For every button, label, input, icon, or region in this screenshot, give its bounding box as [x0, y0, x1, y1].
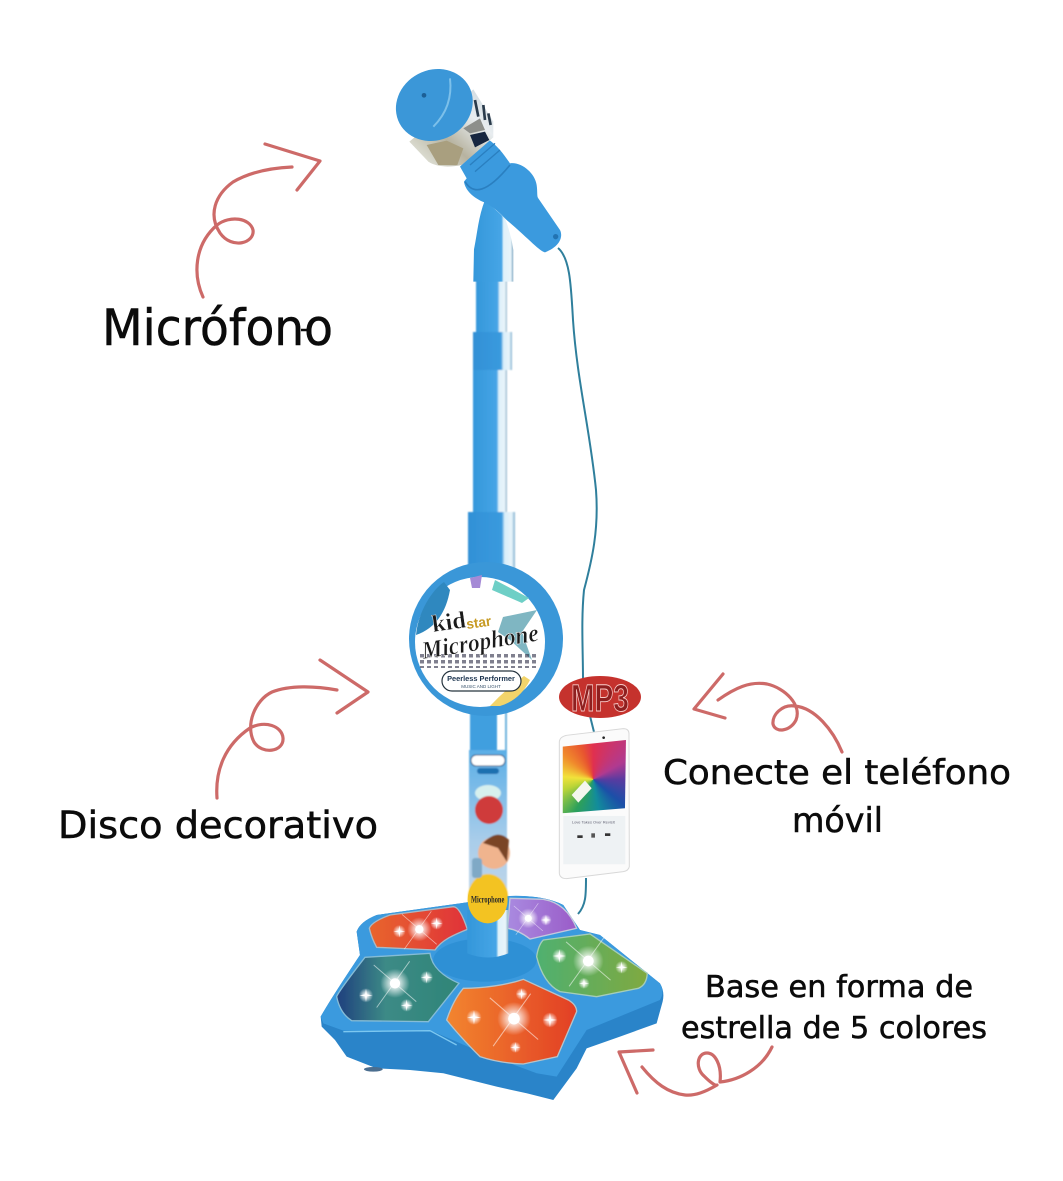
- base body: [321, 896, 663, 1100]
- microphone head and gooseneck: [383, 56, 561, 282]
- mobile phone: [559, 729, 629, 879]
- star base: [321, 877, 663, 1100]
- middle tube: [473, 370, 507, 515]
- base top face: [321, 896, 662, 1077]
- green panel: [537, 934, 647, 997]
- centre hub: [433, 938, 537, 982]
- label: Conecte el teléfono móvil: [663, 753, 1011, 841]
- label: Conecte el teléfono móvil: Conecte el teléfono: [663, 753, 1011, 793]
- MP3 badge: MP3: [571, 678, 629, 720]
- label: Disco decorativo: Disco decorativo: [58, 804, 378, 847]
- player controls: [563, 816, 625, 864]
- upper collar: [473, 332, 512, 370]
- orange panel: [447, 979, 577, 1064]
- disc artwork: [416, 582, 450, 635]
- label: Micrófono: Micrófono: [102, 299, 333, 357]
- stand pole: [468, 270, 515, 920]
- decorative disc: star: [465, 613, 493, 632]
- printed band: [468, 750, 510, 920]
- head cap: [383, 56, 485, 154]
- label: Base en forma de estrella de 5 colores: Base en forma de: [705, 970, 973, 1005]
- handle: [460, 139, 561, 252]
- teal panel: [337, 953, 459, 1022]
- decorative disc: MUSIC AND LIGHT: [461, 684, 501, 689]
- yellow shirt: [468, 877, 508, 923]
- upper tube: [476, 270, 507, 340]
- boy: [478, 837, 510, 869]
- pole socket: [467, 910, 508, 957]
- arrow: base: [619, 1047, 772, 1095]
- album art: [562, 740, 626, 814]
- decorative disc: [409, 562, 563, 716]
- red panel: [369, 907, 467, 950]
- arrow: phone: [694, 674, 842, 752]
- star base: Microphone: [471, 896, 504, 906]
- lower tube: [470, 700, 497, 760]
- disc title: kid: [430, 607, 468, 638]
- mobile phone: Love Takes Over Revisit: [572, 819, 616, 824]
- lower collar: [468, 512, 515, 572]
- label: Base en forma de estrella de 5 colores: [681, 970, 987, 1046]
- label: Conecte el teléfono móvil: móvil: [792, 801, 883, 841]
- printed barrel: [409, 89, 493, 166]
- arrow: microphone: [197, 144, 320, 297]
- violet panel: [508, 898, 577, 939]
- decorative disc: Peerless Performer: [447, 674, 515, 683]
- microphone cable: [558, 248, 597, 914]
- disc pill: [442, 671, 521, 691]
- label: Base en forma de estrella de 5 colores: estrella de 5 colores: [681, 1011, 987, 1046]
- decorative disc: Microphone: [419, 620, 540, 665]
- arrow: decorative disc: [217, 660, 368, 798]
- gooseneck: [473, 200, 513, 282]
